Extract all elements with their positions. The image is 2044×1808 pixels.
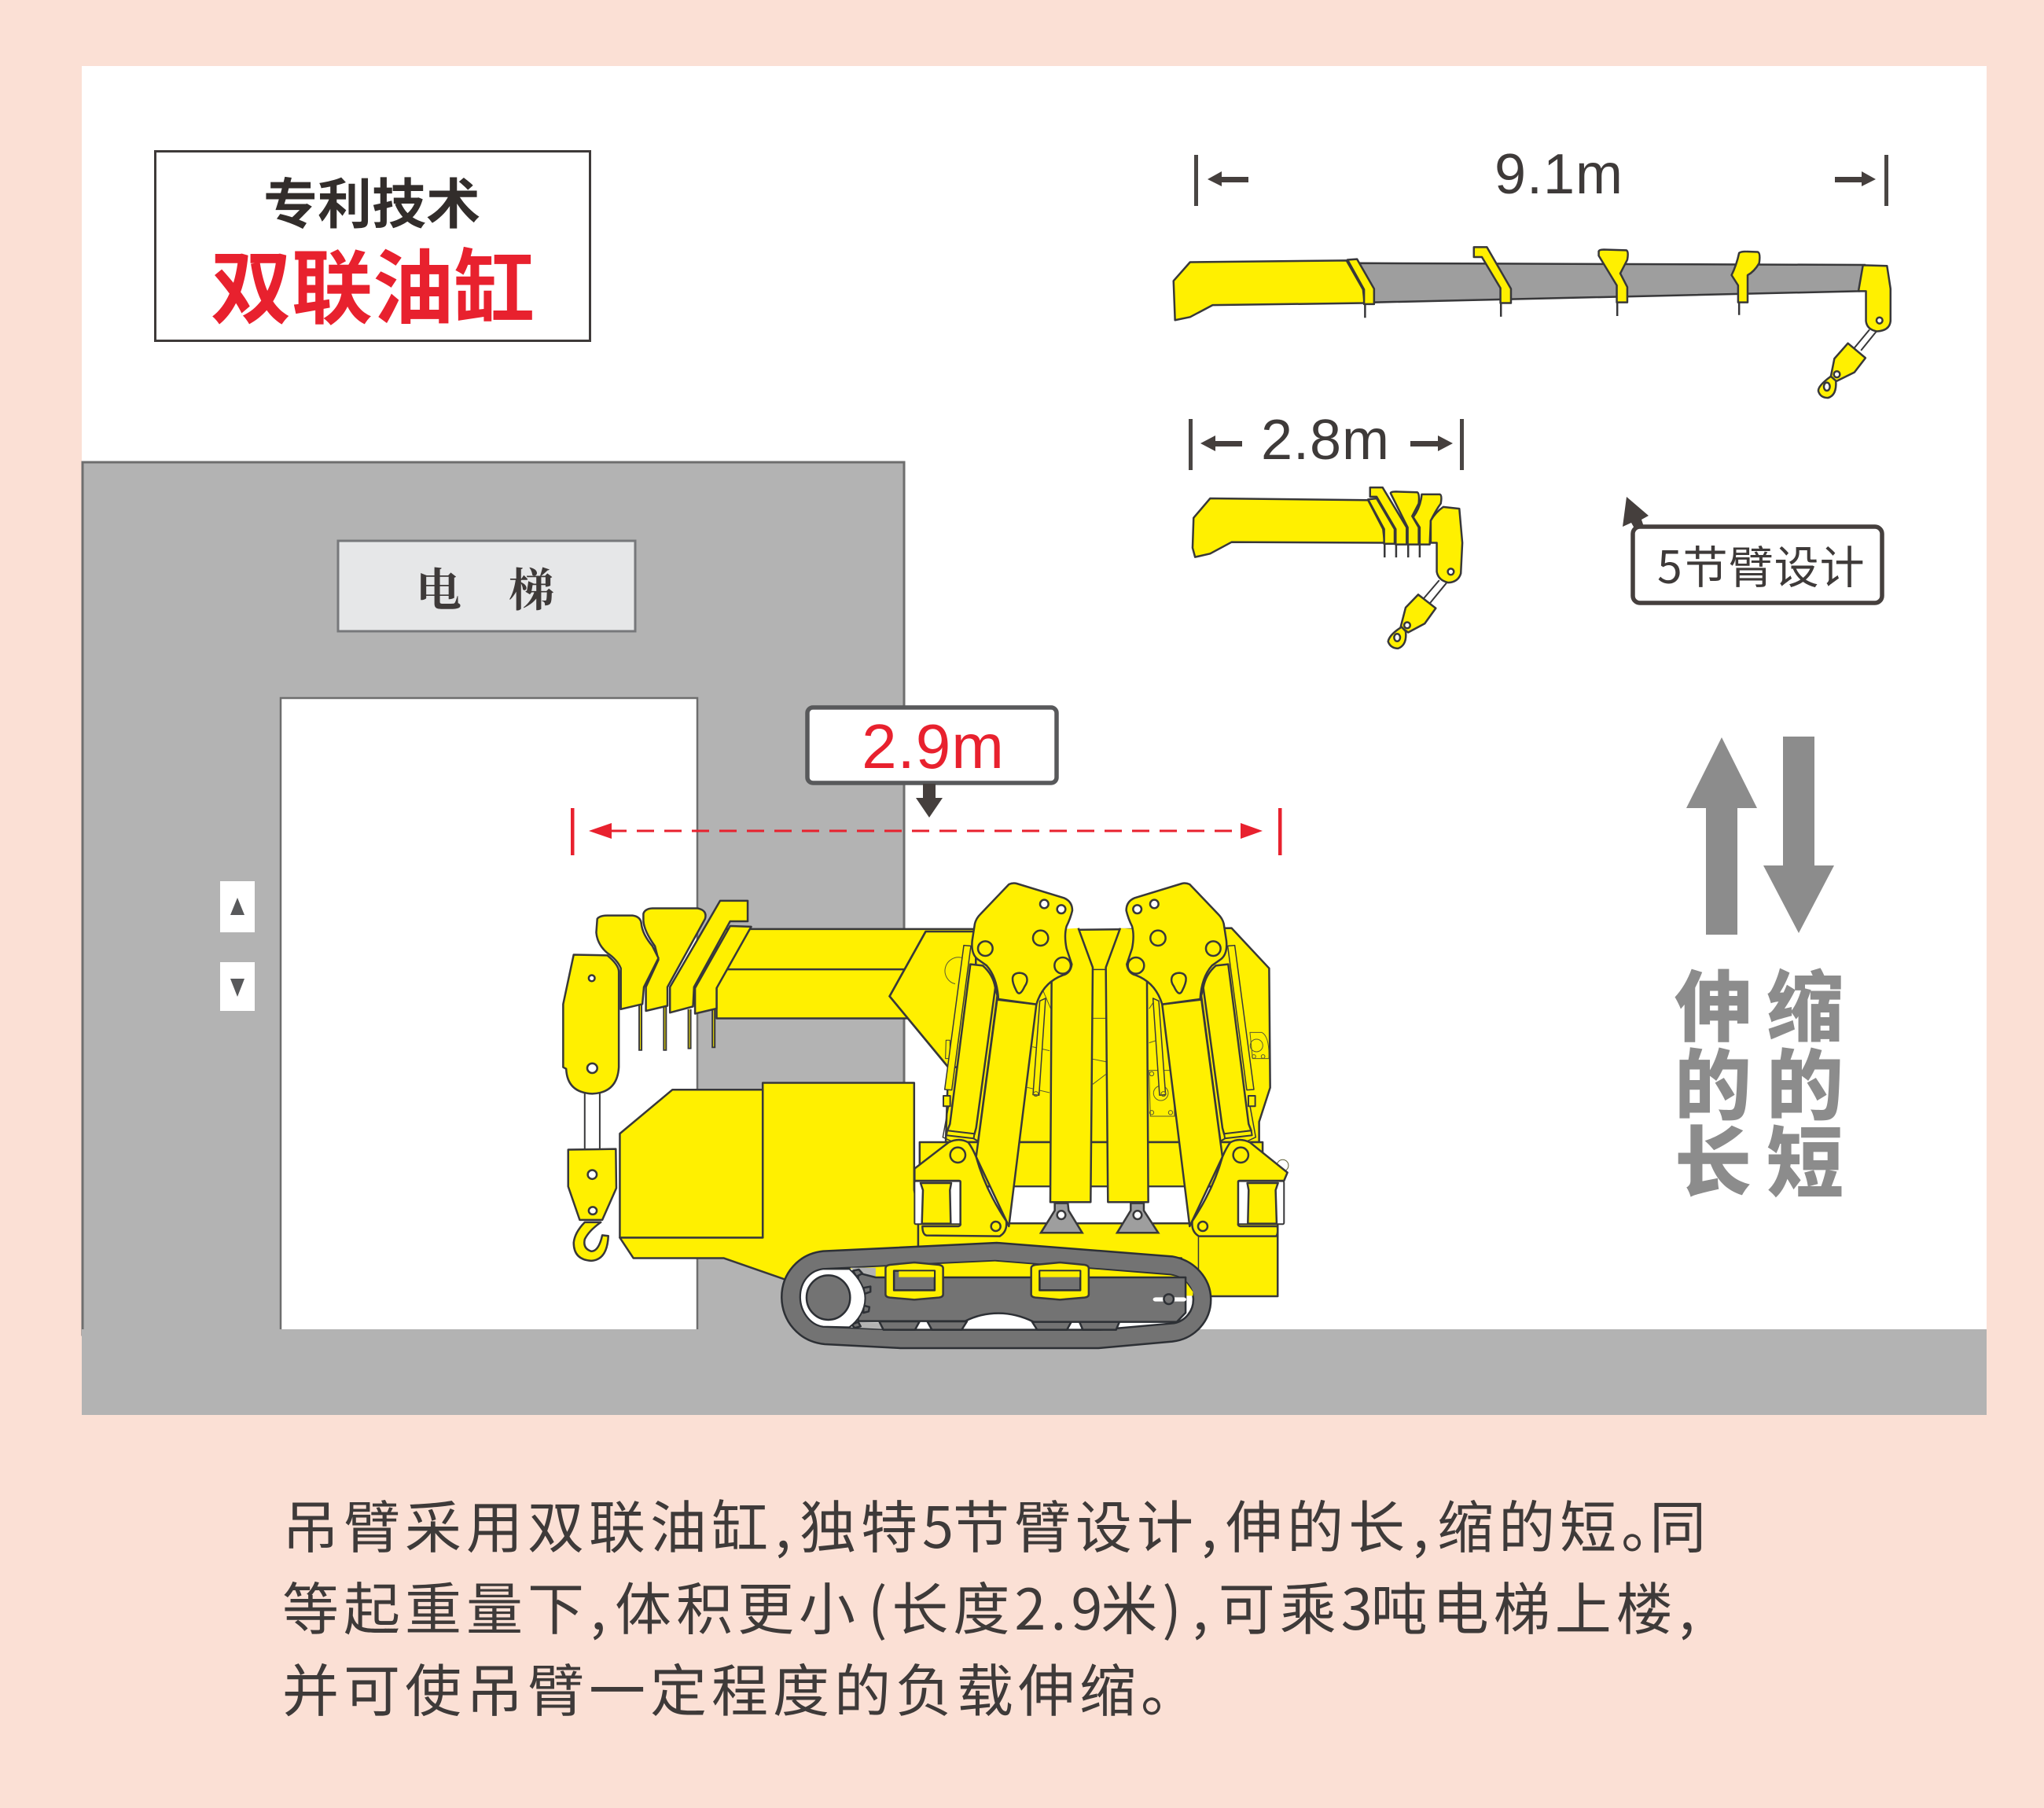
crawler track xyxy=(781,1243,1211,1348)
retracted length label: 短 xyxy=(1766,1101,1844,1213)
panel: white scene xyxy=(82,66,1987,1415)
heading: patent technology: 专利技术 xyxy=(263,160,480,239)
idler wheel xyxy=(800,1269,866,1327)
lower frame xyxy=(918,1223,1278,1296)
extended length label: 长 xyxy=(1675,1101,1752,1213)
left outrigger xyxy=(914,884,1072,1237)
extended length label: 的 xyxy=(1675,1024,1752,1136)
track roller clips xyxy=(885,1262,943,1299)
description text: 并可使吊臂一定程度的负载伸缩。 xyxy=(282,1645,1202,1728)
counterweight xyxy=(619,1083,921,1281)
elevator sign xyxy=(338,541,635,631)
width callout 2.9m: 2.9m xyxy=(862,711,1005,781)
description text: 等起重量下,体积更小(长度2.9米),可乘3吨电梯上楼, xyxy=(282,1564,1700,1646)
elevator door xyxy=(281,698,697,1331)
dimension: 9.1m xyxy=(1194,143,1888,206)
short boom 2.8m xyxy=(1193,487,1462,649)
elevator sign: 梯 xyxy=(509,565,554,616)
right center leg xyxy=(1106,928,1149,1202)
up arrow xyxy=(1686,737,1757,935)
heading: double cylinder: 双联油缸 xyxy=(211,223,535,340)
telescoping rods xyxy=(641,1004,714,1051)
down arrow xyxy=(1763,737,1834,933)
retracted length label: 的 xyxy=(1766,1024,1844,1136)
center legs and outriggers xyxy=(914,884,1289,1237)
carriage xyxy=(858,1273,1186,1322)
title box xyxy=(156,151,590,341)
red width dimension line xyxy=(571,808,1281,855)
sprocket teeth xyxy=(852,1270,870,1328)
tension bolt xyxy=(1153,1297,1186,1302)
crane body xyxy=(890,928,1270,1142)
extended length label xyxy=(1675,946,1752,1213)
elevator wall xyxy=(83,462,904,1335)
floor xyxy=(82,1329,1987,1415)
long boom 9.1m xyxy=(1174,247,1891,398)
inner mechanism details xyxy=(945,957,1269,1116)
center feet xyxy=(1041,1203,1083,1233)
boom base xyxy=(717,929,976,1019)
width callout 2.9m xyxy=(807,707,1057,818)
crane xyxy=(563,901,1278,1296)
callout: 5-section boom: 5节臂设计 xyxy=(1657,532,1866,597)
elevator sign: 电 xyxy=(416,565,461,616)
dimension: 9.1m: 9.1m xyxy=(1494,143,1623,206)
description text xyxy=(282,1482,1711,1728)
right outrigger xyxy=(1127,884,1288,1237)
callout: 5-section boom xyxy=(1623,497,1882,603)
hook assembly xyxy=(585,1091,600,1151)
rollers xyxy=(879,1321,1119,1330)
retracted length label: 缩 xyxy=(1766,946,1844,1057)
dimension: 2.8m: 2.8m xyxy=(1261,409,1390,472)
dimension: 2.8m xyxy=(1189,409,1464,472)
retracted length label xyxy=(1766,946,1844,1213)
elevator call buttons xyxy=(220,881,255,1011)
left center leg xyxy=(1050,928,1093,1202)
description text: 吊臂采用双联油缸,独特5节臂设计,伸的长,缩的短。同 xyxy=(282,1482,1711,1564)
extended length label: 伸 xyxy=(1675,946,1752,1057)
telescoping sections xyxy=(695,926,752,1013)
